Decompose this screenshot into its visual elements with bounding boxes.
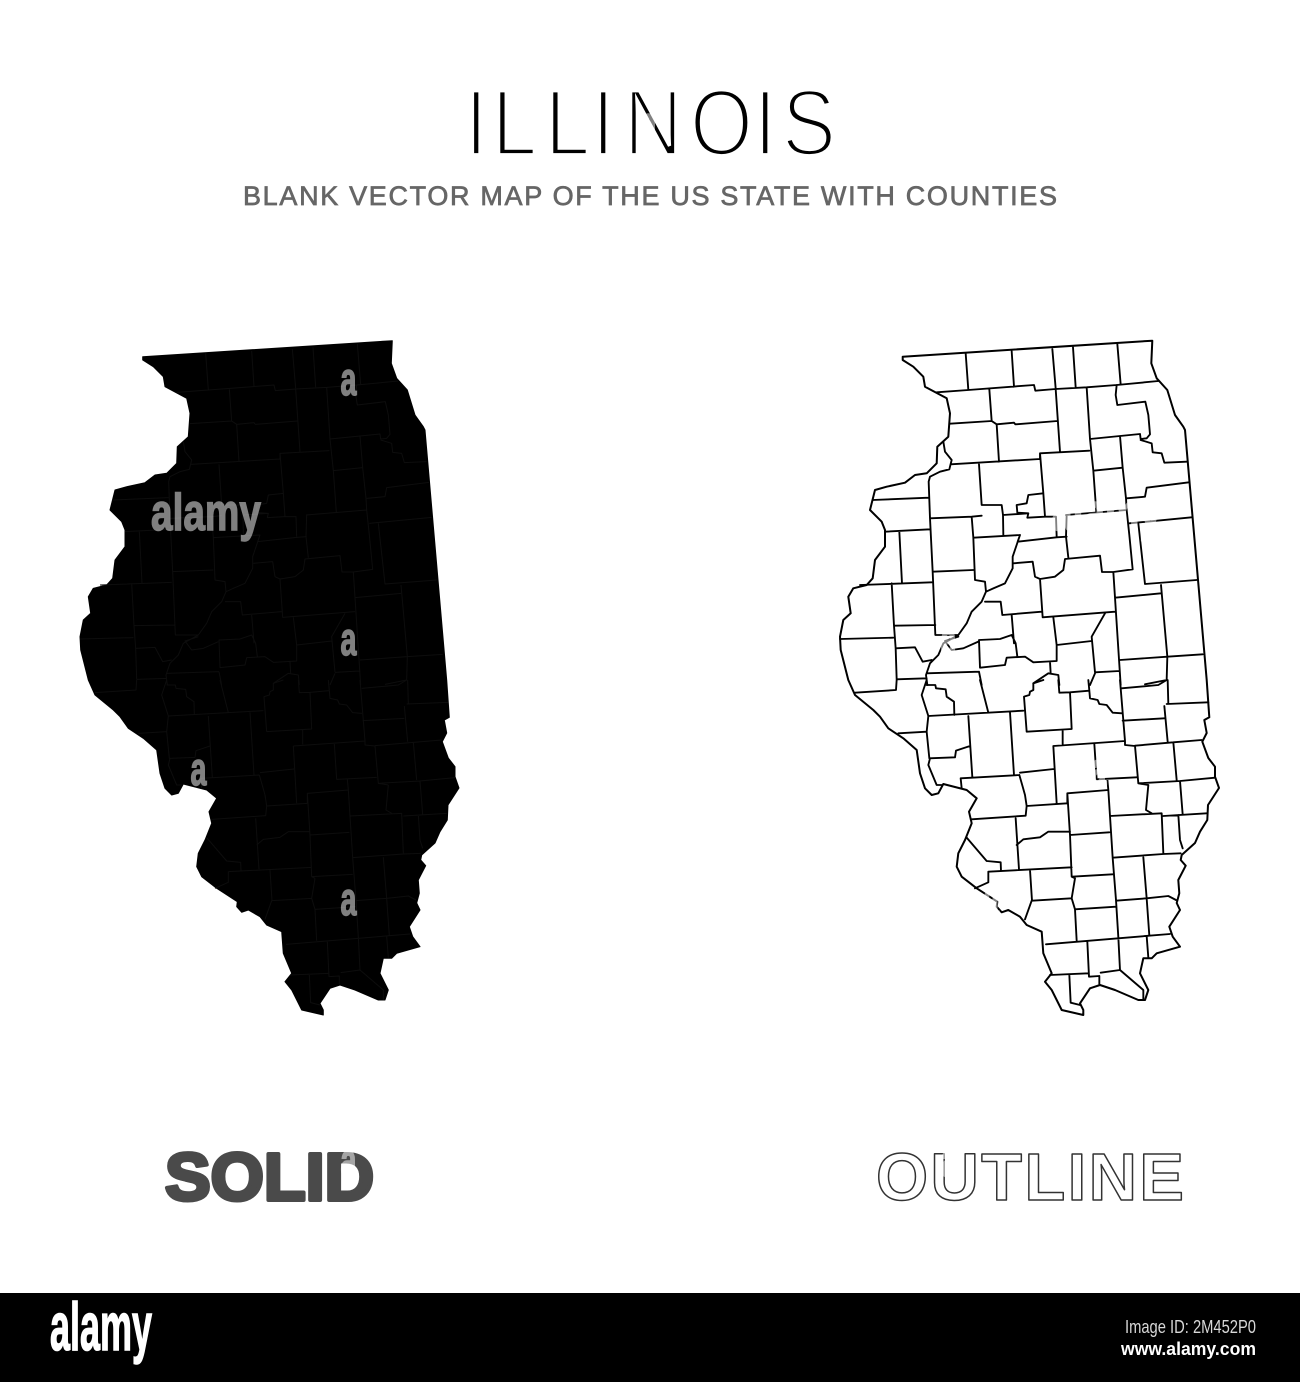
watermarks: a <box>190 743 207 795</box>
watermarks: a <box>340 613 357 665</box>
outline map with counties <box>840 341 1219 1015</box>
watermarks: a <box>1090 743 1107 795</box>
image id: Image ID: 2M452P0 <box>1125 1317 1256 1337</box>
footer bar <box>0 1289 1300 1382</box>
solid label: SOLID <box>165 1140 374 1215</box>
watermarks: a <box>340 873 357 925</box>
watermarks: a <box>940 613 957 665</box>
watermarks: a <box>340 1134 357 1186</box>
title: ILLINOIS <box>465 70 836 175</box>
watermarks: a <box>983 873 999 925</box>
watermarks: a <box>940 1134 957 1186</box>
watermarks: a <box>340 353 357 405</box>
footer logo: alamy <box>50 1289 152 1365</box>
watermarks <box>151 97 1161 1186</box>
solid map <box>80 341 459 1015</box>
subtitle: BLANK VECTOR MAP OF THE US STATE WITH COUNTIES <box>243 181 1057 211</box>
watermarks: a <box>640 97 657 149</box>
faint county lines on solid map <box>80 344 455 1005</box>
county borders of outline map <box>840 344 1215 1005</box>
site url: www.alamy.com <box>1120 1339 1256 1359</box>
watermarks: alamy <box>151 484 261 542</box>
outline label: OUTLINE <box>876 1140 1184 1215</box>
watermarks: alamy <box>1051 484 1161 542</box>
